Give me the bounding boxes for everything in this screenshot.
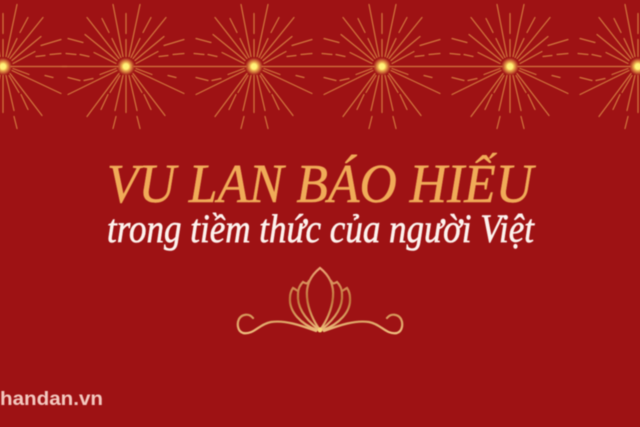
lotus outer petals	[290, 288, 350, 330]
right scroll	[324, 315, 402, 333]
lotus centre petal	[307, 268, 333, 330]
fireworks row	[0, 4, 640, 128]
lotus base highlight	[318, 328, 322, 332]
icon: firework 4	[318, 4, 446, 128]
icon: firework 2	[62, 4, 190, 128]
subtitle: trong tiềm thức của người Việt	[107, 206, 535, 251]
lotus middle petals	[298, 281, 342, 329]
left scroll	[238, 315, 316, 333]
icon: firework 6	[574, 4, 640, 128]
title: VU LAN BÁO HIẾU	[107, 153, 536, 214]
watermark: handan.vn	[0, 389, 103, 410]
icon: lotus ornament	[238, 268, 402, 333]
icon: firework 3	[190, 4, 318, 128]
icon: firework 5	[446, 4, 574, 128]
icon: firework 1	[0, 4, 67, 128]
